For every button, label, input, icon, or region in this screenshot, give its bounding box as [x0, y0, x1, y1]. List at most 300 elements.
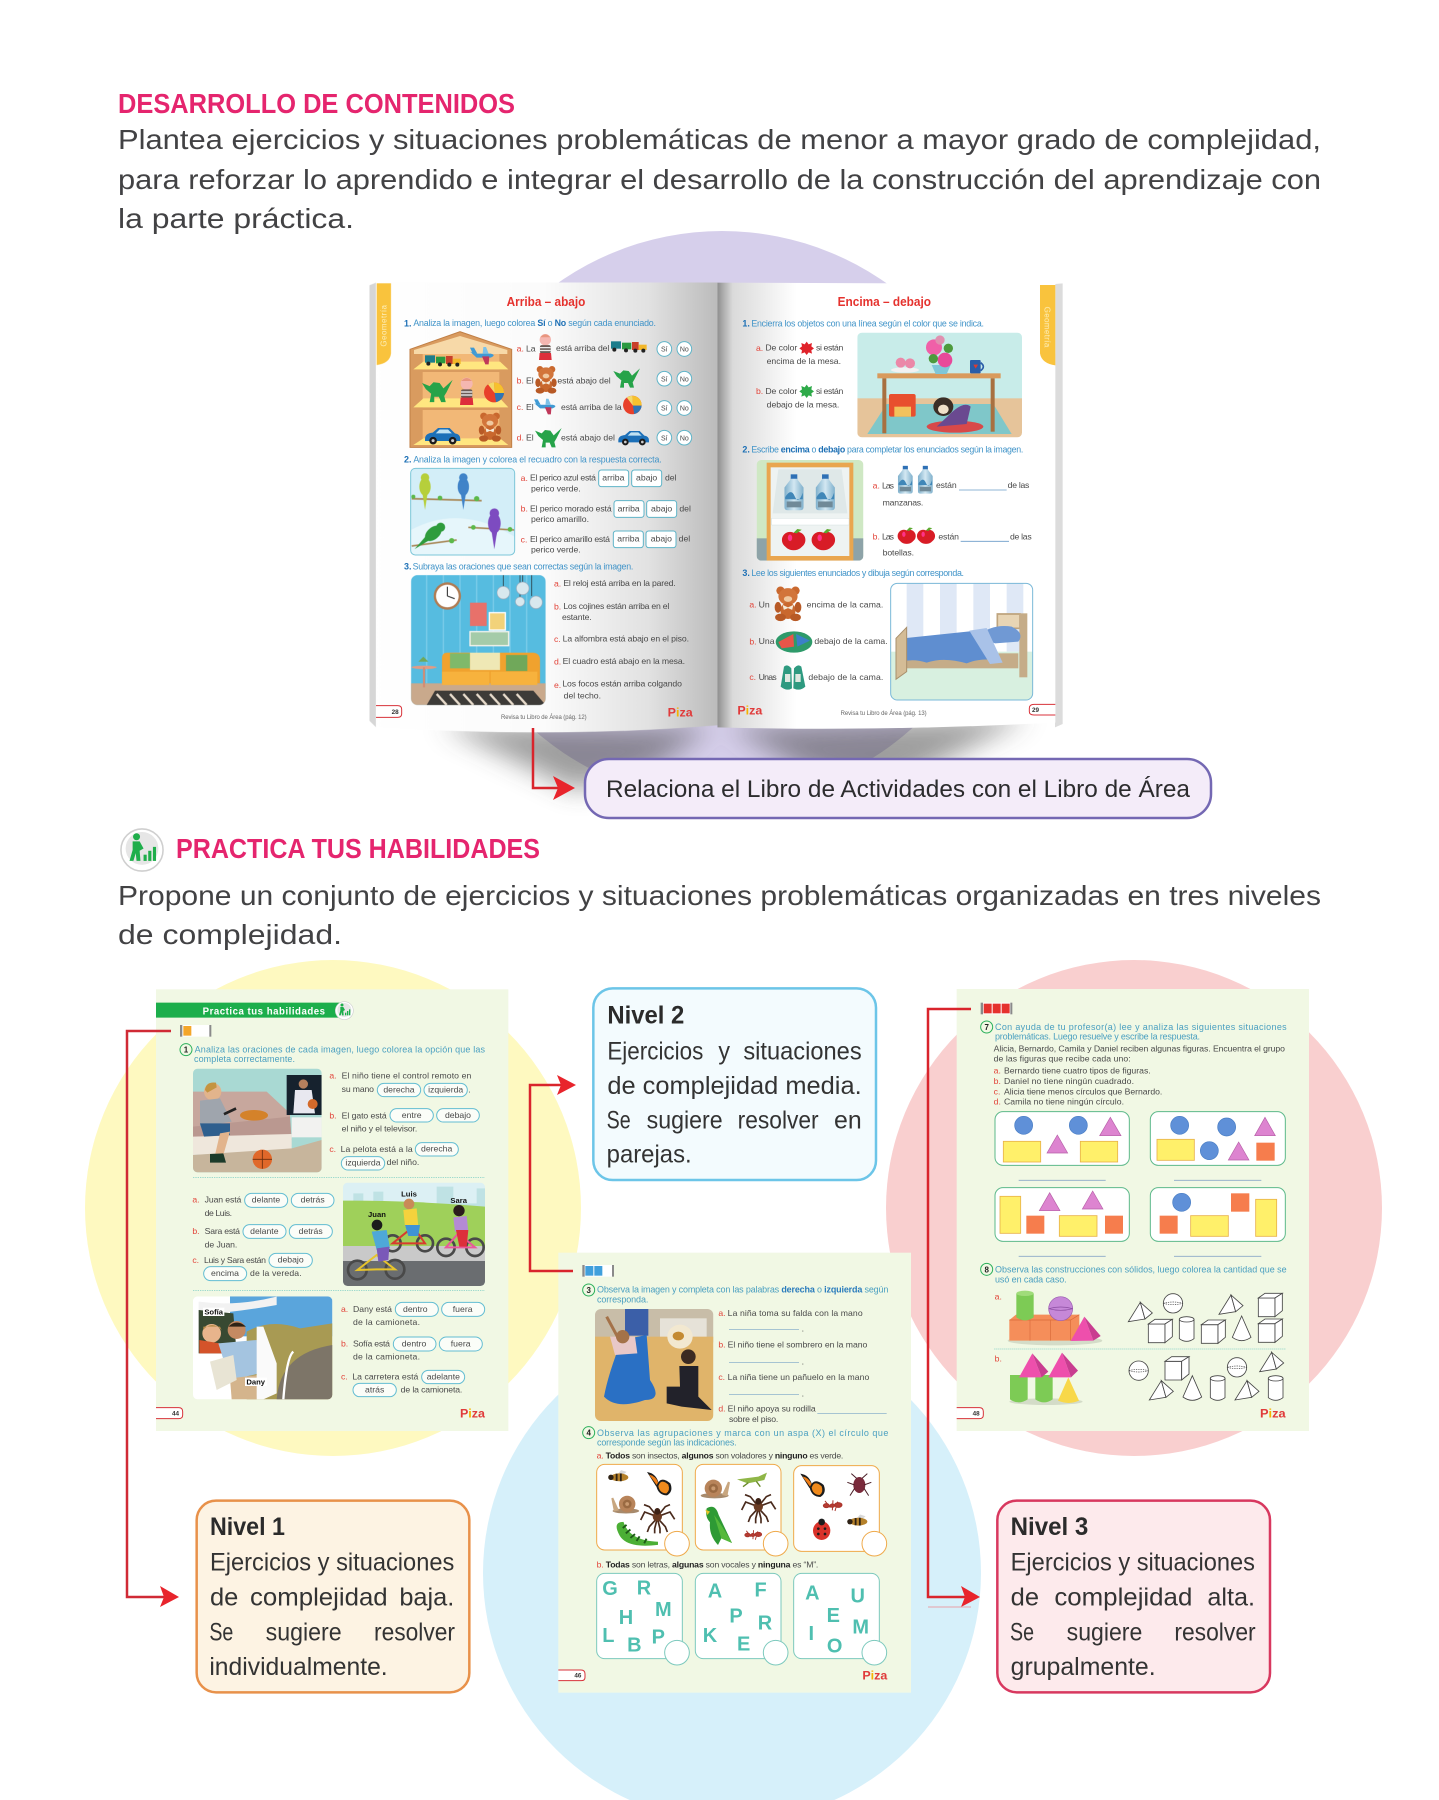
exercise 1: Encierra los objetos con una línea según el color que se indica.: [751, 319, 984, 329]
callout: nivel 3: Nivel 3: [1011, 1513, 1088, 1541]
exercises on first photo: izquierda: [428, 1084, 463, 1094]
exercises on third photo: de la camioneta.: [353, 1317, 420, 1327]
exercise 2: 2.: [404, 455, 411, 465]
solids construction a: [995, 1291, 1282, 1345]
exercise 1: El: [526, 402, 534, 412]
photo: boy watching tv: [193, 1069, 322, 1172]
exercises on second photo: Juan está: [205, 1195, 242, 1205]
exercise 3: Un: [759, 599, 770, 609]
callout: nivel 1: sugiere: [266, 1619, 342, 1647]
instruction 7: problemáticas. Luego resuelve y escribe la respuesta.: [995, 1032, 1200, 1042]
exercise 2: perico amarillo.: [531, 514, 589, 524]
callout: relaciona el libro: [585, 759, 1211, 818]
exercise 1: No: [680, 376, 689, 383]
exercise 1: b.: [517, 375, 524, 385]
exercise 2: manzanas.: [883, 497, 923, 507]
completion exercises: d.: [718, 1404, 726, 1414]
illustration: kids on bikes: Luis: [401, 1190, 417, 1199]
exercise 3: b.: [749, 636, 757, 646]
instruction 1: Analiza las oraciones de cada imagen, luego colorea la opción que las: [195, 1045, 485, 1055]
exercise 1: está arriba de la: [561, 402, 622, 412]
exercises on second photo: Luis y Sara están: [204, 1255, 266, 1265]
exercises on second photo: Sara está: [205, 1226, 240, 1236]
instruction 3: 3: [586, 1286, 591, 1295]
exercise 2: del: [665, 473, 677, 483]
exercise 3: Unas: [759, 672, 777, 682]
exercise 2: abajo: [651, 503, 672, 513]
exercise 3: b.: [554, 601, 561, 611]
exercises on second photo: delante: [252, 1195, 280, 1205]
exercise 2: perico verde.: [531, 484, 581, 494]
exercise 3: Los cojines están arriba en el: [563, 601, 669, 611]
page number 46: [558, 1670, 585, 1681]
decorative circle: yellow: [85, 960, 581, 1456]
exercise 2: b.: [873, 531, 880, 541]
option b: b. Todas son letras, algunas son vocales y ninguna es “M”.: [597, 1560, 818, 1570]
exercise 1: Sí: [661, 406, 668, 413]
exercises on first photo: .: [468, 1084, 471, 1094]
living room illustration: [411, 575, 546, 705]
exercises on second photo: de Luis.: [205, 1208, 232, 1218]
completion exercises: El niño apoya su rodilla: [728, 1404, 816, 1414]
exercise 2: Analiza la imagen y colorea el recuadro con la respuesta correcta.: [413, 455, 662, 465]
page title: Arriba – abajo: [507, 295, 586, 309]
photo: couple and van: Dany: [246, 1378, 266, 1387]
page number 28: 28: [392, 709, 399, 716]
exercise 1: está abajo del: [561, 433, 615, 443]
instruction 8: Observa las construcciones con sólidos, luego colorea la cantidad que se: [995, 1265, 1287, 1275]
heading: desarrollo de contenidos: DESARROLLO DE CONTENIDOS: [118, 88, 515, 119]
problem statement: a.: [994, 1066, 1001, 1076]
exercise 1: [404, 318, 692, 447]
completion exercises: c.: [718, 1372, 725, 1382]
exercise 1: Sí: [661, 347, 668, 354]
callout: nivel 2: [593, 988, 876, 1180]
exercise 3: c.: [749, 672, 756, 682]
exercises on third photo: fuera: [453, 1304, 473, 1314]
callout: nivel 1: resolver: [374, 1619, 455, 1647]
exercise 3: 3.: [404, 561, 411, 571]
letter cards: E: [827, 1605, 840, 1627]
problem statement: d.: [994, 1096, 1001, 1106]
letter cards: B: [627, 1635, 642, 1657]
exercises on second photo: de la vereda.: [250, 1268, 302, 1278]
exercises on second photo: debajo: [278, 1255, 304, 1265]
exercise 2: Las: [882, 480, 895, 490]
exercise 2: b.: [521, 504, 528, 514]
letter cards: M: [852, 1616, 869, 1638]
exercise 2: abajo: [651, 534, 672, 544]
page number 44: 44: [172, 1410, 180, 1417]
exercise 2: [742, 445, 1032, 561]
exercise 1: No: [680, 347, 689, 354]
exercise 2: c.: [521, 534, 527, 544]
completion exercises: a.: [718, 1308, 726, 1318]
book right page: [717, 283, 1063, 729]
completion exercises: b.: [718, 1340, 726, 1350]
exercise 2: El perico azul está: [530, 473, 596, 483]
letter cards: G: [602, 1578, 618, 1600]
exercises on second photo: b.: [192, 1226, 200, 1236]
side tab geometría: Geometría: [1042, 307, 1051, 348]
instruction 4: corresponde según las indicaciones.: [597, 1437, 737, 1447]
level indicator: two bars: [582, 1265, 614, 1277]
page number 44: [156, 1408, 183, 1419]
decorative circle: purple: [437, 231, 1007, 801]
exercise 1: d.: [517, 433, 524, 443]
practice paragraph: Propone un conjunto de ejercicios y situaciones problemáticas organizadas en tres niveles: [118, 880, 1321, 911]
page number 28: [376, 706, 402, 717]
page reference: Revisa tu Libro de Área (pág. 12): [501, 714, 587, 721]
completion exercises: [718, 1308, 887, 1424]
intro paragraph: Plantea ejercicios y situaciones problemáticas de menor a mayor grado de complejidad,: [118, 124, 1321, 155]
callout: nivel 2: de complejidad media.: [607, 1072, 862, 1100]
exercises on first photo: c.: [329, 1144, 336, 1154]
book shadow: [440, 716, 1030, 790]
bed illustration: [891, 583, 1033, 700]
exercises on third photo: adelante: [427, 1371, 460, 1381]
exercise 2: del: [679, 534, 690, 544]
callout: nivel 3: [997, 1501, 1270, 1692]
callout: nivel 3: grupalmente.: [1011, 1653, 1156, 1681]
exercise 3: Una: [759, 636, 775, 646]
exercise 3: estante.: [562, 612, 592, 622]
page number 48: 48: [973, 1410, 980, 1417]
exercises on second photo: encima: [211, 1268, 239, 1278]
callout: relaciona el libro: Relaciona el Libro de Actividades con el Libro de Área: [606, 776, 1190, 803]
problem statement: [994, 1044, 1285, 1106]
exercise 1: Analiza la imagen, luego colorea Sí o No según cada enunciado.: [413, 318, 656, 328]
instruction 3: corresponda.: [597, 1294, 648, 1304]
callout: nivel 2: sugiere: [647, 1106, 723, 1134]
piza logo: Piza: [737, 703, 763, 717]
exercise 2: arriba: [617, 534, 640, 544]
table scene illustration: [857, 333, 1022, 437]
parrots illustration: [411, 468, 515, 555]
callout: nivel 3: sugiere: [1067, 1619, 1142, 1647]
exercise 3: e.: [554, 680, 561, 690]
instruction 8: usó en cada caso.: [995, 1274, 1067, 1284]
problem statement: Daniel no tiene ningún cuadrado.: [1004, 1076, 1134, 1086]
letter cards: A: [805, 1582, 820, 1604]
exercise 3: El reloj está arriba en la pared.: [563, 578, 676, 588]
instruction 4: [583, 1427, 888, 1447]
exercise 2: Escribe encima o debajo para completar los enunciados según la imagen.: [751, 445, 1023, 455]
exercises on third photo: c.: [341, 1371, 348, 1381]
exercises on first photo: su mano: [342, 1084, 374, 1094]
problem statement: Bernardo tiene cuatro tipos de figuras.: [1004, 1066, 1151, 1076]
callout: nivel 2: parejas.: [607, 1141, 692, 1169]
exercise 1: 1.: [742, 319, 750, 329]
callout: nivel 1: de: [210, 1584, 238, 1612]
letter cards: E: [737, 1634, 750, 1656]
exercise 1: De color: [765, 386, 797, 396]
completion exercises: El niño tiene el sombrero en la mano: [728, 1340, 868, 1350]
exercise 2: de las: [1010, 531, 1032, 541]
problem statement: c.: [994, 1086, 1000, 1096]
exercise 1: El: [526, 375, 534, 385]
exercises on third photo: a.: [341, 1304, 348, 1314]
arrow: worksheet 1 to nivel 1: [127, 1031, 179, 1607]
problem statement: de las figuras que recibe cada uno:: [994, 1054, 1131, 1064]
completion exercises: La niña toma su falda con la mano: [728, 1308, 863, 1318]
page reference: Revisa tu Libro de Área (pág. 13): [841, 710, 927, 717]
exercises on second photo: de Juan.: [205, 1239, 237, 1249]
completion exercises: La niña tiene un pañuelo en la mano: [728, 1372, 870, 1382]
letter cards: O: [827, 1636, 842, 1658]
instruction 7: 7: [984, 1023, 989, 1032]
piza logo: Piza: [668, 706, 693, 720]
exercise 1: No: [680, 435, 689, 442]
exercises on first photo: b.: [329, 1110, 337, 1120]
exercise 1: a.: [756, 343, 763, 353]
instruction 1: completa correctamente.: [194, 1054, 295, 1064]
exercises on second photo: [192, 1193, 334, 1281]
page number 46: 46: [574, 1673, 582, 1680]
exercises on third photo: de la camioneta.: [353, 1352, 420, 1362]
exercises on third photo: La carretera está: [352, 1371, 419, 1381]
decorative circle: pink: [886, 960, 1382, 1456]
letter cards: I: [809, 1623, 814, 1645]
exercise 2: El perico amarillo está: [530, 534, 610, 544]
problem statement: Camila no tiene ningún círculo.: [1004, 1096, 1124, 1106]
exercise 1: 1.: [404, 318, 411, 328]
exercises on third photo: dentro: [402, 1338, 426, 1348]
exercise 3: a.: [749, 599, 757, 609]
level indicator: three bars: [981, 1003, 1012, 1014]
exercises on first photo: entre: [402, 1110, 422, 1120]
letter cards: H: [619, 1607, 633, 1629]
letter cards: U: [850, 1586, 865, 1608]
exercise 1: si están: [816, 386, 844, 396]
insect cards: [597, 1464, 887, 1556]
exercise 1: La: [526, 344, 536, 354]
instruction 4: 4: [586, 1429, 591, 1438]
page number 29: 29: [1032, 707, 1040, 714]
callout: nivel 3: Se: [1010, 1619, 1034, 1647]
exercises on first photo: izquierda: [345, 1157, 381, 1167]
exercise 2: [404, 455, 691, 555]
side tab geometría: Geometría: [380, 304, 389, 347]
exercise 2: están: [938, 531, 959, 541]
instruction 7: Con ayuda de tu profesor(a) lee y analiza las siguientes situaciones: [995, 1022, 1287, 1032]
instruction 7: [981, 1021, 1287, 1042]
completion exercises: sobre el piso.: [729, 1414, 778, 1424]
callout: nivel 2: resolver: [738, 1106, 819, 1134]
exercises on third photo: b.: [341, 1338, 348, 1348]
exercises on first photo: La pelota está a la: [341, 1144, 413, 1154]
callout: nivel 2: Se: [607, 1106, 631, 1134]
exercise 3: [742, 568, 1033, 700]
solids construction b: b.: [995, 1354, 1002, 1364]
arrow: book to callout: [533, 728, 575, 800]
letter cards: A: [708, 1580, 722, 1602]
exercises on first photo: [329, 1071, 479, 1170]
exercise 1: a.: [517, 344, 524, 354]
completion exercises: .: [802, 1356, 804, 1366]
instruction 8: 8: [984, 1265, 989, 1274]
photo: couple and van: Sofía: [204, 1308, 224, 1317]
exercises on first photo: debajo: [445, 1110, 471, 1120]
exercise 1: b.: [756, 386, 763, 396]
exercises on first photo: a.: [329, 1071, 337, 1081]
callout: nivel 1: Nivel 1: [210, 1513, 285, 1541]
callout: nivel 2: Nivel 2: [607, 1001, 684, 1029]
page number 29: [1029, 704, 1055, 715]
exercise 2: del: [679, 503, 691, 513]
callout: nivel 1: baja.: [399, 1584, 454, 1612]
exercise 3: a.: [554, 579, 561, 589]
instruction 4: Observa las agrupaciones y marca con un aspa (X) el círculo que: [597, 1428, 888, 1438]
exercise 3: La alfombra está abajo en el piso.: [563, 633, 689, 643]
exercise 1: c.: [517, 402, 523, 412]
completion exercises: .: [802, 1323, 804, 1333]
problem statement: b.: [994, 1076, 1001, 1086]
callout: nivel 2: Ejercicios: [607, 1037, 703, 1065]
callout: nivel 2: en: [834, 1106, 862, 1134]
panel: worksheet level 3: [957, 989, 1309, 1431]
callout: nivel 2: situaciones: [743, 1037, 862, 1065]
intro paragraph: la parte práctica.: [118, 203, 354, 234]
exercises on third photo: fuera: [451, 1338, 471, 1348]
exercises on third photo: atrás: [365, 1384, 385, 1394]
arrow: worksheet 2 to nivel 2: [530, 1075, 576, 1271]
exercise 1: encima de la mesa.: [767, 356, 841, 366]
exercise 2: perico verde.: [531, 545, 581, 555]
exercise 2: a.: [873, 480, 880, 490]
exercise 3: Los focos están arriba colgando: [562, 679, 682, 689]
exercises on second photo: c.: [192, 1255, 199, 1265]
callout: nivel 3: Ejercicios y situaciones: [1011, 1549, 1255, 1577]
option a: a. Todos son insectos, algunos son voladores y ninguno es verde.: [597, 1451, 843, 1461]
exercises on first photo: del niño.: [387, 1157, 419, 1167]
toy shelf illustration: [410, 332, 512, 447]
exercises on third photo: de la camioneta.: [401, 1384, 462, 1394]
exercise 3: Subraya las oraciones que sean correctas según la imagen.: [413, 562, 633, 572]
exercise 2: 2.: [742, 445, 750, 455]
callout: nivel 2: y: [718, 1037, 730, 1065]
piza logo: Piza: [862, 1668, 888, 1682]
solids construction b: [995, 1352, 1284, 1405]
exercise 3: debajo de la cama.: [808, 672, 883, 682]
figure cards: [995, 1112, 1285, 1256]
practice paragraph: de complejidad.: [118, 919, 342, 950]
intro paragraph: [118, 124, 1321, 234]
exercise 3: encima de la cama.: [807, 599, 883, 609]
exercise 2: Las: [882, 531, 895, 541]
exercise 3: del techo.: [564, 690, 601, 700]
callout: nivel 1: [197, 1501, 469, 1692]
exercise 1: está abajo del: [557, 375, 611, 385]
exercises on second photo: a.: [192, 1195, 200, 1205]
exercises on third photo: Dany está: [353, 1304, 392, 1314]
exercise 3: c.: [554, 634, 561, 644]
level indicator: one bar: [180, 1025, 211, 1037]
photo: couple and van: [193, 1296, 332, 1399]
callout: nivel 1: individualmente.: [209, 1653, 388, 1681]
exercise 2: a.: [521, 473, 528, 483]
fridge illustration: [757, 460, 863, 561]
callout: nivel 1: complejidad: [250, 1584, 388, 1612]
instruction 3: [583, 1284, 888, 1304]
exercises on third photo: Sofía está: [353, 1338, 390, 1348]
panel: worksheet level 1: [156, 989, 508, 1431]
illustration: kids on bikes: Juan: [368, 1210, 386, 1219]
green section band: [156, 1002, 353, 1020]
letter cards: R: [758, 1612, 773, 1634]
panel: worksheet level 2: [558, 1253, 911, 1693]
letter cards: R: [637, 1578, 652, 1600]
callout: nivel 3: alta.: [1207, 1584, 1255, 1612]
letter cards: F: [755, 1580, 767, 1602]
illustration: kids on bikes: [343, 1183, 485, 1286]
exercises on third photo: dentro: [403, 1304, 428, 1314]
instruction 1: 1: [184, 1046, 189, 1055]
exercise 1: Sí: [661, 376, 668, 383]
callout: nivel 3: de: [1011, 1584, 1039, 1612]
book left page: [369, 283, 717, 732]
letter cards: K: [703, 1625, 718, 1647]
exercises on first photo: El niño tiene el control remoto en: [342, 1071, 472, 1081]
exercise 2: arriba: [618, 503, 640, 513]
exercises on first photo: derecha: [421, 1144, 452, 1154]
piza logo: Piza: [460, 1406, 485, 1420]
exercise 3: Lee los siguientes enunciados y dibuja según corresponda.: [751, 568, 964, 578]
exercise 3: debajo de la cama.: [814, 636, 888, 646]
exercises on second photo: detrás: [301, 1195, 325, 1205]
exercises on first photo: El gato está: [342, 1110, 387, 1120]
exercise 1: Sí: [661, 435, 668, 442]
practice paragraph: [118, 880, 1321, 950]
letter cards: P: [652, 1626, 665, 1648]
instruction 8: [981, 1263, 1287, 1284]
exercises on second photo: delante: [250, 1226, 279, 1236]
decorative circle: blue: [483, 1324, 981, 1800]
exercise 1: está arriba del: [556, 343, 609, 353]
exercise 2: arriba: [602, 473, 625, 483]
completion exercises: .: [802, 1388, 804, 1398]
exercise 1: No: [680, 406, 689, 413]
letter cards: [597, 1573, 887, 1665]
open book: [369, 283, 1063, 732]
piza logo: Piza: [1260, 1406, 1286, 1420]
solids construction a: a.: [995, 1291, 1002, 1301]
exercise 3: [404, 561, 689, 705]
callout: nivel 3: complejidad: [1054, 1584, 1192, 1612]
exercise 1: si están: [816, 342, 844, 352]
exercise 2: El perico morado está: [530, 503, 612, 513]
green section band: Practica tus habilidades: [203, 1006, 325, 1017]
exercises on first photo: el niño y el televisor.: [342, 1124, 417, 1134]
exercise 1: [742, 319, 1022, 437]
problem statement: Alicia tiene menos círculos que Bernardo.: [1004, 1086, 1162, 1096]
exercise 3: d.: [554, 657, 561, 667]
exercise 3: 3.: [742, 568, 750, 578]
side tab geometría: [1040, 285, 1055, 365]
page title: Encima – debajo: [838, 295, 931, 309]
exercises on first photo: derecha: [383, 1084, 415, 1094]
exercise 1: debajo de la mesa.: [767, 399, 839, 409]
callout: nivel 1: Se: [209, 1619, 233, 1647]
illustration: kids on bikes: Sara: [450, 1196, 468, 1205]
letter cards: L: [602, 1625, 614, 1647]
exercise 2: botellas.: [883, 548, 914, 558]
problem statement: Alicia, Bernardo, Camila y Daniel reciben algunas figuras. Encuentra el grupo: [994, 1044, 1285, 1054]
intro paragraph: para reforzar lo aprendido e integrar el desarrollo de la construcción del aprendizaje con: [118, 164, 1321, 195]
instruction 1: [180, 1044, 485, 1064]
letter cards: M: [655, 1599, 672, 1621]
callout: nivel 1: Ejercicios y situaciones: [210, 1549, 454, 1577]
